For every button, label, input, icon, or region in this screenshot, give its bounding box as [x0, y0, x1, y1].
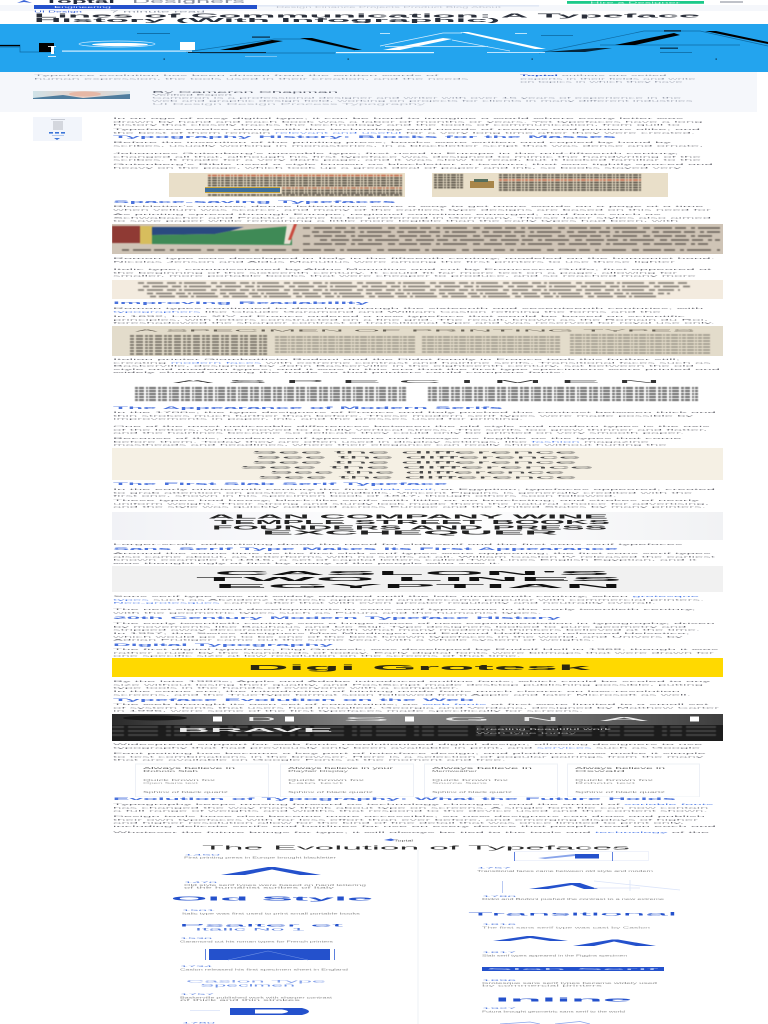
image: italic type sample — [112, 280, 723, 299]
paragraph: Sans serif type was not widely adopted until the late nineteenth century, when grotesque types such as Akzidenz Grotesk appeared and became popular with commercial printers. Neo-grotesques came after that with even greater regularity and neutrality overall. — [113, 596, 704, 604]
timeline entry right 1817: 1817 — [482, 952, 521, 954]
card 4: Quick brown fox — [575, 778, 655, 782]
timeline entry right 1896 — [482, 980, 659, 1004]
article header panel with intro and author — [0, 72, 757, 112]
paragraph: Around the same time as the first slab serif types were appearing, the first sans serif types also came about, as letterforms with no serifs at all. William Caslon IV released the earliest known example in 1816, a set of capital letters called Two Lines English Egyptian, and it was thought ugly at first by many of the people who saw it. — [113, 552, 715, 564]
card 4: Roboto text — [575, 781, 636, 785]
breadcrumb — [34, 10, 209, 14]
infographic logo — [384, 838, 414, 842]
card 1: Always believe in — [143, 766, 236, 770]
image: dark design photo: G — [443, 717, 491, 723]
timeline entry left 1530 — [180, 938, 335, 960]
image: a specimen: A S P E C I M E N — [173, 379, 661, 384]
letter A white — [336, 32, 546, 53]
author name — [152, 90, 430, 106]
heading: typeface evolution on the web: Typeface Evolution on the Web — [113, 698, 474, 702]
card 1: Roboto Slab — [143, 769, 199, 773]
timeline entry left 1470: of the humanist scribes of Italy — [184, 886, 337, 890]
image: digi grotesk banner — [112, 658, 723, 677]
timeline entry left 1450: 1450 — [184, 854, 226, 856]
image: see the difference lines — [112, 448, 723, 480]
card 4 — [567, 764, 700, 797]
card 4: Sphinx of black quartz — [575, 790, 667, 794]
image: dark design photo: Creating beautiful work — [476, 727, 614, 731]
paragraph: These types had heavy, block-like serifs with little or no bracketing, and strokes of nearly uniform weight. Their strong and sturdy look made them the natural choice for advertising, and the style was quickly adopted across Europe and the United States by many printers. — [113, 500, 709, 508]
timeline entry right 1927: 1927 — [482, 1008, 521, 1010]
infographic logo: Toptal — [394, 838, 414, 842]
image: early slab serif advertisement — [112, 512, 723, 540]
paragraph: In 1957, the Swiss designers Max Miedinger and Eduard Hoffmann released Helvetica, which would go on to be one of the best known typefaces in the world, and Univers by Adrian Frutiger came out the same year, with a whole system of weights. — [113, 632, 690, 641]
card 3: Quick brown fox — [432, 778, 510, 782]
heading: digital typography: Digital Typography — [113, 643, 333, 647]
paragraph: The first digital typeface, Digi Grotesk, was developed by Rudolf Hell in 1968, though it was rather crude by the standards of today. Early digital fonts were bitmaps that were drawn for one specific size at low resolution on the screens of that time. — [113, 648, 718, 657]
timeline entry right transitional: 1780 — [482, 896, 521, 898]
heading: improving readability: Improving Readability — [113, 301, 369, 305]
hero banner with letter A forms — [0, 24, 768, 72]
image: dark design photo: S — [342, 717, 394, 723]
card 1: Sphinx of black quartz — [143, 790, 230, 794]
image: see the difference lines: See the difference — [269, 470, 565, 474]
card 3: Source Sans — [432, 781, 490, 785]
card 3 — [424, 764, 558, 797]
timeline entry left 1734: Specimen — [200, 984, 295, 988]
card 2 — [280, 764, 414, 797]
timeline entry right 1757 — [477, 868, 680, 893]
timeline entry right 1896: Inline — [495, 998, 632, 1004]
card 4: Always believe in — [575, 766, 666, 770]
timeline entry left 1734: 1734 — [180, 966, 217, 968]
heading: sans serif: Sans Serif Type Makes Its First Appearance — [113, 547, 618, 551]
card 1 — [135, 764, 269, 797]
paragraph: The early twentieth century saw a huge wave of new experimentation in typography, driven by movements like Bauhaus and De Stijl. Type designers looked to pure geometry and stripped away decoration, in line with what many modernist thinkers believed at the time. — [113, 622, 715, 631]
right column top glyph — [514, 852, 648, 861]
left glyph fragment — [0, 33, 195, 57]
image: caslon two lines egyptian — [112, 566, 723, 592]
image: specimen sheet on parchment — [112, 326, 723, 356]
card 3: Merriweather — [432, 769, 477, 773]
image: see the difference lines: See the difference — [255, 456, 581, 460]
timeline entry right 1817 — [482, 952, 664, 971]
image: early slab serif advertisement: ALAN COMPANY WINE — [208, 514, 611, 520]
font pairing cards — [135, 764, 700, 797]
image: dark design photo: D — [246, 717, 276, 723]
timeline entry right 1757: 1757 — [477, 868, 516, 870]
timeline entry left 1734 — [180, 966, 350, 988]
breadcrumb: 7 minute read — [110, 11, 209, 14]
image: manuscript page right — [432, 173, 668, 197]
card 3: Sphinx of black quartz — [432, 790, 514, 794]
letter A large black — [541, 30, 768, 53]
timeline entry right 1817: Slab serif types appeared in the Figgins specimen — [482, 954, 628, 958]
paragraph: The next significant developments in sans serif type came in the early twentieth century, with the geometric types such as Futura and the humanist types. — [113, 608, 696, 614]
paragraph: By the late 1980s, Apple and Adobe introduced outline fonts, which could be scaled to any size without losing their quality, and PostScript made desktop publishing possible, putting type tools in the hands of everyone with a computer. — [113, 680, 710, 689]
image: illuminated manuscript band — [112, 224, 723, 254]
timeline entry left 1530: Garamond cut his roman types for French printers — [180, 940, 335, 944]
card 2: Playfair Display — [288, 769, 349, 773]
letter A black — [188, 36, 362, 57]
image: see the difference lines: See the difference — [257, 476, 577, 480]
timeline entry right transitional: Didot and Bodoni pushed the contrast to a new extreme — [482, 897, 666, 901]
timeline entry left 1450: First printing press in Europe brought blackletter — [184, 855, 336, 859]
heading: blocks for the masses: Typography History: Blocks for the Masses — [113, 135, 616, 139]
card 2: Lato text — [288, 781, 345, 785]
card 1: Open Sans text — [143, 781, 199, 785]
author name: UI Design Design Process Typography — [152, 103, 430, 106]
paragraph: In 1692, Louis XIV of France ordered a new typeface that would be based on scientific principles, with letters constructed on a fine grid. The result, known as the Romain du Roi, foreshadowed the sharper contrast of transitional type and was reserved for royal use only. — [113, 316, 715, 324]
timeline entry left 1757: 1757 — [180, 994, 219, 996]
card 3: Always believe in — [432, 766, 533, 770]
paragraph: The web brought its own set of constraints, as web fonts at first were limited to a small set of system fonts that users had installed. Georgia and Verdana, designed by Matthew Carter in 1996, were some of the first typefaces made specifically for screens. — [113, 704, 719, 712]
top navigation bar — [0, 0, 768, 11]
timeline entry left 1734: Caslon released his first specimen sheet in England — [180, 968, 350, 972]
image: caslon two lines egyptian: EGYPTIAN — [214, 584, 622, 590]
infographic title: The Evolution of Typefaces — [202, 846, 631, 852]
timeline entry left 1501: Italic No 1 — [195, 928, 306, 932]
timeline entry left 1757: of thick and thin strokes — [180, 998, 303, 1002]
author name: Verified Expert — [152, 94, 234, 97]
article title: Lines of Communication: A Typeface — [34, 13, 700, 19]
image: see the difference lines: See the difference — [239, 466, 594, 470]
timeline entry right 1816 — [482, 924, 656, 946]
image: dark design photo: A — [600, 717, 652, 723]
image: caslon two lines egyptian: TWO LINES — [196, 577, 626, 583]
image: early slab serif advertisement: EXCHEQUER — [262, 530, 559, 536]
infographic: the evolution of typefaces — [171, 838, 680, 1024]
top navigation bar: Engineering — [54, 5, 112, 9]
timeline entry right 1927: Futura brought geometric sans serif to the world — [482, 1010, 626, 1014]
timeline entry left 1450 — [184, 854, 336, 875]
paragraph: In the same era, the introduction of hinting made fonts much clearer on low-resolution screens, and the TrueType format soon followed from Apple and later Microsoft as well. — [113, 690, 691, 696]
image: specimen sheet on parchment: A SPECIMEN OF PRINTING TYPES — [135, 329, 695, 333]
image: early slab serif advertisement: TEMPLE STREET BOOKS — [214, 520, 612, 526]
timeline entry left 1470: Old Style — [171, 896, 373, 902]
timeline entry right 1817: Slab Serif — [486, 967, 661, 971]
heading: 20th century: 20th Century Modern Typeface History — [113, 616, 560, 620]
timeline entry left 1470: 1470 — [184, 882, 222, 884]
timeline entry left 1501: Psalter et — [179, 924, 353, 928]
timeline entry right transitional: Transitional — [468, 912, 677, 916]
image: dark design photo: Web type today — [476, 731, 579, 735]
image caption: Larger-scale advertising drove the need for slab serif and the first sans serif typefaces — [113, 544, 682, 546]
article title — [34, 13, 700, 24]
timeline entry left 1501: 1501 — [182, 910, 220, 912]
heading: what the future holds: Evolution of Typography: What the Future Holds — [113, 797, 676, 801]
card 2: Always believe in your — [288, 766, 393, 770]
card 1: Quick brown fox — [143, 778, 217, 782]
timeline entry left 1470: Old style serif types were based on hand lettering — [184, 883, 368, 887]
image: early slab serif advertisement: FOUNDERS AND PRESS — [212, 526, 610, 532]
timeline entry left 1757 — [180, 994, 333, 1015]
share sidebar — [33, 117, 82, 141]
timeline entry left 1530: 1530 — [180, 938, 217, 940]
card 2: Quick brown fox — [288, 778, 366, 782]
heading: first slab serif: The First Slab Serif Typeface — [113, 482, 447, 486]
timeline entry right 1896: by commercial printers — [482, 984, 605, 988]
timeline entry left 1757: Baskerville published work with sharper contrast — [180, 996, 333, 1000]
timeline entry right 1896: 1896 — [482, 980, 521, 982]
timeline entry left 1501 — [179, 910, 362, 932]
image: see the difference lines: See the difference — [251, 460, 577, 464]
timeline entry right transitional — [468, 896, 677, 916]
image: dark design photo — [112, 714, 723, 741]
timeline entry left 1734: Caslon Type — [186, 980, 326, 984]
timeline entry right 1816: The first sans serif type was cast by Caslon — [482, 926, 652, 930]
author photo — [33, 91, 130, 99]
top navigation bar: Hire a Designer — [590, 0, 680, 4]
article title: History (With Infographic) — [34, 18, 501, 24]
heading: modern serifs: The Appearance of Modern Serifs — [113, 406, 503, 410]
image: dark design photo: N — [520, 717, 560, 723]
paragraph: Font pairing has become a key part of interface design, and platforms now make it simple to test combinations in the browser. Here is a selection of popular pairings from the many that are available on Google Fonts at the moment and free. — [113, 752, 706, 761]
paragraph: In the early nineteenth century the first slab serif, or Egyptian, typefaces appeared, created to grab attention on posters and handbills. Vincent Figgins is generally credited with the first one, shown in his specimen book of 1817, though others soon followed. — [113, 488, 715, 497]
author name: By Cameron Chapman — [152, 90, 340, 94]
timeline entry left 1470 — [171, 882, 373, 902]
timeline entry right 1896: Grotesque sans serif types became widely used — [482, 981, 659, 985]
paragraph: Typography keeps moving forward as technology changes, and the arrival of variable fonts has changed the way many think about type on screens. A single font file can now contain a full range of weights and widths that respond to the device used and the content shown. — [113, 804, 713, 812]
card 4: Oswald — [575, 769, 627, 773]
image: see the difference lines: See the difference — [251, 450, 577, 454]
image: dark design photo: BRAVE — [177, 728, 339, 734]
paragraph: One of the most noticeable differences between the old style and modern types is the axis of the letters, which moved to a fully vertical stress. The serifs too grew thinner and flatter, and the hairlines became so delicate they could only be printed on very smooth paper. — [113, 426, 710, 434]
timeline entry right 1927 — [482, 1008, 626, 1024]
image: caslon two lines egyptian: CASLON'S — [214, 571, 614, 577]
timeline entry right 1757: Transitional faces came between old style and modern — [477, 869, 655, 873]
image: digi grotesk banner: Digi Grotesk — [247, 663, 597, 672]
card 2: Sphinx of black quartz — [288, 790, 375, 794]
image: manuscript page left — [169, 173, 405, 197]
paragraph: In the 1700s, the type designers of France and Italy pushed the contrast between thick and thin strokes much further than before. These modern serif types were made possible by improvements in paper, ink, and the presses used for printing. — [113, 412, 716, 420]
timeline entry right 1816: 1816 — [482, 924, 521, 926]
top navigation bar: Design Finance Projects Product Blog About — [276, 5, 502, 9]
heading: space-saving typefaces: Space-saving Typefaces — [113, 200, 396, 204]
breadcrumb: UI Design — [34, 11, 85, 14]
timeline entry left 1501: Italic type was first used to print small portable books — [182, 912, 362, 916]
